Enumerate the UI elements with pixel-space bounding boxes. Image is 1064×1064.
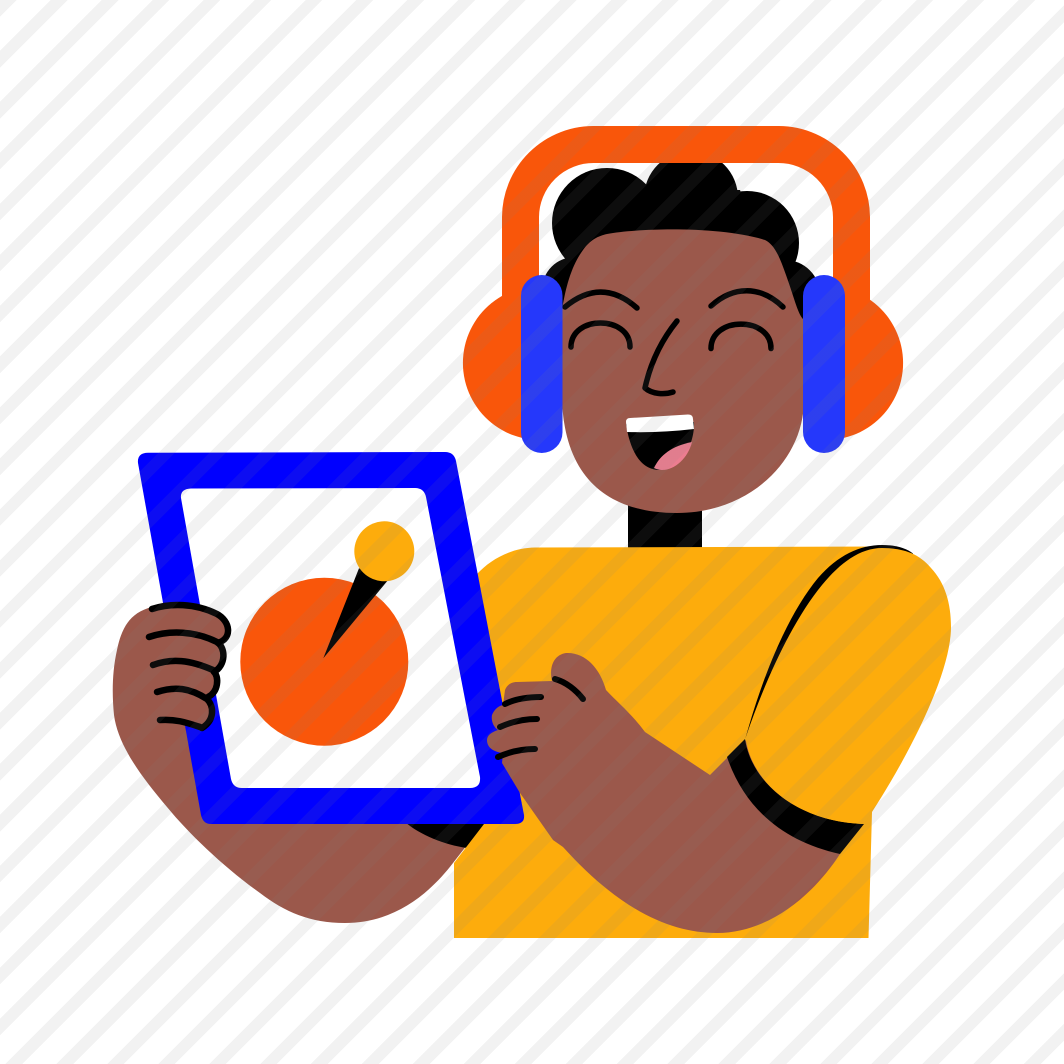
- right arm and hand: [487, 653, 840, 933]
- mouth: [626, 414, 694, 470]
- screen icon: orange disc: [240, 578, 408, 746]
- tablet frame: [138, 452, 524, 824]
- shirt: [454, 546, 885, 938]
- hair: [542, 151, 820, 330]
- headphones right pad: [803, 275, 845, 453]
- face: [562, 229, 804, 513]
- right sleeve: [746, 548, 951, 824]
- screen icon: yellow ball: [354, 521, 414, 581]
- left arm: [113, 607, 485, 923]
- left sleeve band: [405, 822, 486, 848]
- neck: [628, 495, 702, 550]
- screen icon: black pointer: [323, 568, 387, 658]
- left hand finger lines: [149, 605, 228, 728]
- headphones headband: [520, 144, 852, 320]
- facial features: [565, 291, 783, 394]
- right sleeve shadow line: [746, 545, 913, 738]
- headphones left pad: [521, 275, 562, 453]
- right sleeve band: [727, 739, 864, 854]
- headphones ear cups: [463, 286, 903, 440]
- tablet screen: [181, 488, 480, 788]
- right hand finger lines: [498, 679, 583, 757]
- left hand: [125, 605, 228, 728]
